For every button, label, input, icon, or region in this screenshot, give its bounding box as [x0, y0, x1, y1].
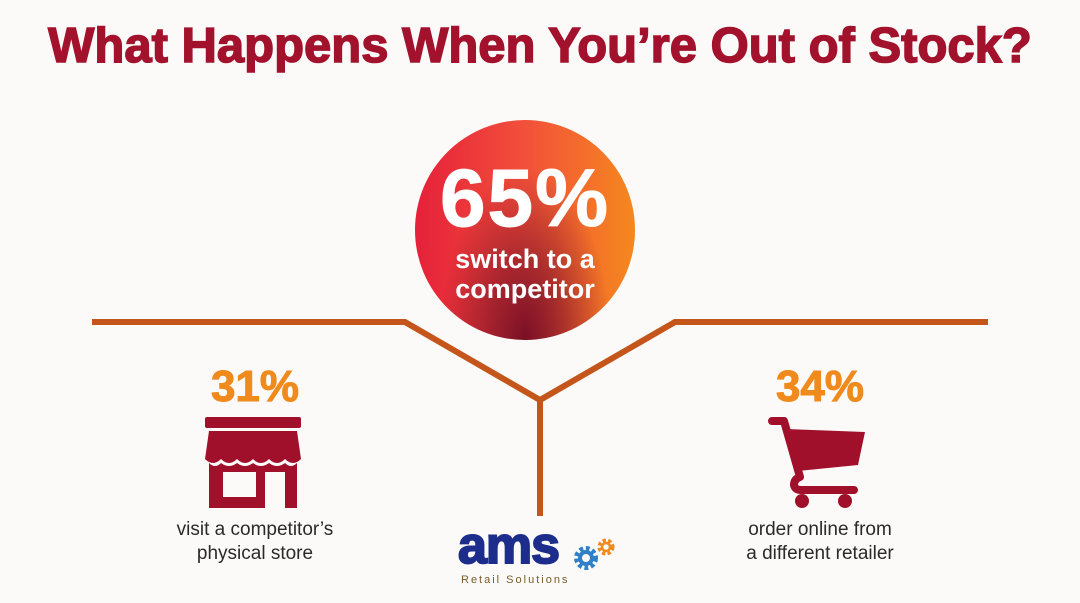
icon: shopping cart	[768, 417, 865, 508]
caption: order online from	[748, 519, 892, 540]
circle caption: competitor	[455, 274, 595, 304]
logo: AMS Retail Solutions	[458, 517, 614, 586]
stat 34%: 34%	[776, 362, 864, 411]
logo wordmark: ams	[458, 517, 559, 575]
caption: physical store	[197, 543, 313, 564]
caption: visit a competitor’s	[177, 519, 333, 540]
caption	[746, 519, 894, 564]
caption: a different retailer	[746, 543, 894, 564]
stat 31%: 31%	[211, 362, 299, 411]
panel: physical store	[176, 362, 333, 564]
title: What Happens When You’re Out of Stock?	[48, 19, 1032, 73]
big number: 65%	[440, 153, 610, 244]
icon: gears	[574, 538, 614, 570]
logo tagline: Retail Solutions	[461, 574, 569, 586]
icon: store	[205, 417, 301, 508]
circle caption: switch to a	[455, 244, 595, 274]
circle caption	[455, 244, 595, 304]
circle: 65% switch to a competitor	[415, 120, 635, 340]
panel: online retailer	[746, 362, 894, 564]
caption	[176, 519, 333, 564]
